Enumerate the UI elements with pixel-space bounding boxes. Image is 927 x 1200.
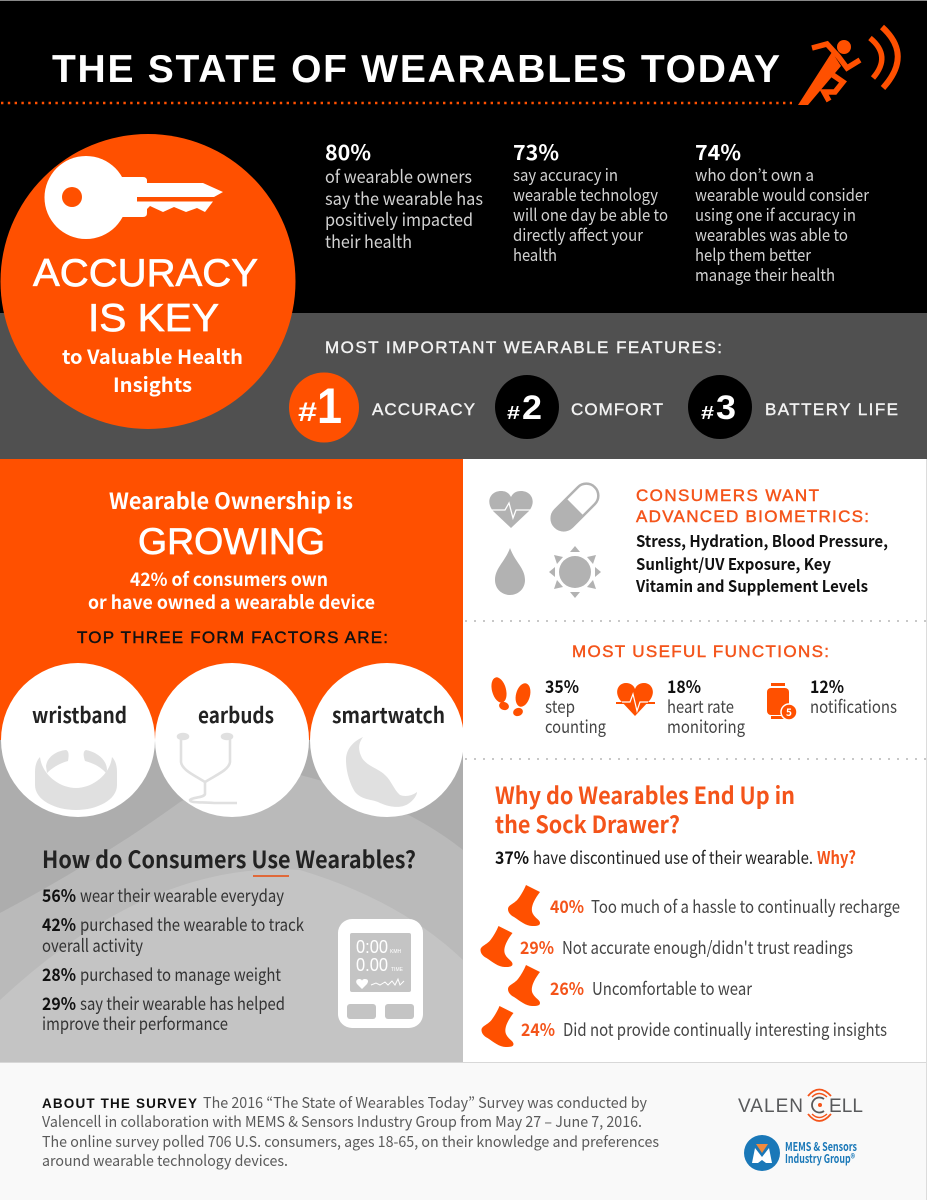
list: consumer usage stats: purchased to manage weight: [80, 962, 281, 987]
reason: uncomfortable: Uncomfortable to wear: [592, 976, 752, 1001]
logo: valencell: [738, 1090, 863, 1121]
heading: how do consumers use wearables: How do Consumers Use Wearables?: [42, 841, 416, 875]
reason: accuracy: Not accurate enough/didn't trust readings: [562, 935, 853, 960]
text: about the survey: [42, 1092, 659, 1171]
function: notifications: notifications: [810, 694, 897, 719]
text: about the survey: ABOUT THE SURVEY: [42, 1096, 197, 1111]
icon: orange heart: [616, 683, 655, 716]
function: step counting: [545, 674, 606, 739]
heading: sock drawer: the Sock Drawer?: [495, 806, 680, 840]
function: heart rate monitoring: [667, 674, 745, 739]
logo: valencell: VALEN: [738, 1096, 803, 1117]
form factor: earbuds: earbuds: [198, 700, 274, 730]
icon: fitness device: 0.00: [356, 955, 388, 975]
reason: recharge: 40%: [550, 894, 584, 919]
feature 3 battery life: BATTERY LIFE: [765, 400, 898, 419]
form factor: smartwatch: smartwatch: [332, 700, 445, 730]
icon: footprints: [489, 676, 533, 717]
list: consumer usage stats: purchased the wearable to track: [80, 912, 304, 937]
heading: accuracy is key: Insights: [113, 369, 192, 398]
heading: accuracy is key: [33, 252, 258, 398]
feature 1 accuracy: #: [298, 397, 317, 427]
form factor: wristband: [1, 663, 155, 817]
heading: most important features: MOST IMPORTANT WEARABLE FEATURES:: [325, 338, 722, 357]
icon: grey drop: [495, 548, 525, 595]
reason: uncomfortable: [508, 965, 752, 1006]
stat: 73%: health: [513, 242, 557, 266]
stat: 73%: say accuracy in: [513, 162, 618, 186]
heading: wearable ownership growing: or have owned a wearable device: [88, 589, 375, 615]
feature 2 comfort: [495, 375, 663, 439]
reason: insights: [482, 1006, 887, 1047]
list: consumer usage stats: 56%: [42, 883, 76, 908]
reason: insights: 24%: [521, 1017, 555, 1042]
heading: most useful functions: MOST USEFUL FUNCTIONS:: [572, 642, 829, 661]
reason: uncomfortable: 26%: [550, 976, 584, 1001]
heading: wearable ownership growing: Wearable Ownership is: [109, 484, 353, 516]
stat: 80%: say the wearable has: [325, 186, 483, 211]
list: consumer usage stats: overall activity: [42, 933, 143, 958]
logo: mems and sensors industry group: MEMS & Sensors: [785, 1138, 857, 1155]
text: biometrics list: Sunlight/UV Exposure, Key: [636, 551, 831, 575]
heading: accuracy is key: ACCURACY: [33, 252, 258, 295]
stat: 80%: positively impacted: [325, 207, 473, 232]
stat: 80%: their health: [325, 229, 412, 254]
stat: 74%: wearables was able to: [695, 222, 848, 246]
stat: 73%: [513, 137, 668, 266]
function: step counting: 35%: [545, 674, 579, 699]
icon: key: [44, 156, 223, 239]
stat: 73%: directly affect your: [513, 222, 644, 246]
heading: wearable ownership growing: GROWING: [138, 521, 325, 562]
function: heart rate monitoring: monitoring: [667, 714, 745, 739]
function: notifications: 12%: [810, 674, 844, 699]
logo: mems and sensors industry group: Industry Group®: [785, 1150, 855, 1167]
heading: wearable ownership growing: 42% of consumers own: [130, 566, 328, 592]
panel: features grey band: [0, 313, 927, 459]
feature 2 comfort: 2: [522, 389, 542, 427]
text: discontinued use: have discontinued use of their wearable.: [533, 845, 813, 870]
icon: fitness device: 0:00: [356, 937, 388, 957]
feature 2 comfort: COMFORT: [571, 400, 663, 419]
stat: 74%: [695, 137, 870, 286]
list: consumer usage stats: [42, 883, 304, 1036]
panel: accuracy is key circle: [0, 134, 296, 429]
icon: wristband: [35, 750, 117, 810]
heading: consumers want advanced biometrics: CONSUMERS WANT: [636, 486, 819, 505]
heading: accuracy is key: to Valuable Health: [62, 341, 243, 370]
logo: valencell: ELL: [829, 1096, 863, 1117]
function: heart rate monitoring: heart rate: [667, 694, 734, 719]
icon: earbuds: [178, 734, 237, 803]
text: about the survey: The 2016 “The State of Wearables Today” Survey was conducted by: [203, 1092, 647, 1113]
text: biometrics list: Stress, Hydration, Blood Pressure,: [636, 528, 888, 552]
form factor: earbuds: [155, 663, 309, 817]
stat: 73%: 73%: [513, 137, 559, 167]
list: consumer usage stats: wear their wearable everyday: [80, 883, 284, 908]
stat: 74%: manage their health: [695, 262, 835, 286]
form factor: wristband: wristband: [32, 700, 127, 730]
feature 3 battery life: 3: [716, 389, 736, 427]
heading: consumers want advanced biometrics: [636, 486, 869, 526]
heading: accuracy is key: IS KEY: [88, 297, 219, 340]
reason: recharge: [508, 885, 900, 926]
list: consumer usage stats: say their wearable has helped: [80, 991, 285, 1016]
text: biometrics list: Vitamin and Supplement Levels: [635, 573, 868, 597]
stat: 73%: will one day be able to: [513, 202, 668, 226]
list: consumer usage stats: improve their performance: [42, 1011, 228, 1036]
stat: 80%: 80%: [325, 137, 371, 167]
stat: 74%: 74%: [695, 137, 741, 167]
icon: orange watch: [767, 683, 797, 720]
stat: 80%: [325, 137, 483, 254]
stat: 74%: who don’t own a: [695, 162, 814, 186]
form factor: smartwatch: [310, 663, 464, 817]
stat: 74%: help them better: [695, 242, 812, 266]
feature 3 battery life: #: [701, 403, 714, 423]
function: notifications: [810, 674, 897, 719]
list: consumer usage stats: 28%: [42, 962, 76, 987]
panel: header black band: [0, 0, 927, 313]
panel: orange ownership background: [0, 459, 463, 749]
heading: wearable ownership growing: [88, 484, 375, 615]
text: about the survey: around wearable technology devices.: [42, 1150, 288, 1171]
feature 2 comfort: #: [507, 403, 520, 423]
reason: accuracy: [480, 926, 853, 967]
stat: 74%: using one if accuracy in: [695, 202, 856, 226]
panel: footer: [0, 1062, 927, 1200]
function: heart rate monitoring: 18%: [667, 674, 701, 699]
icon: smartwatch: [346, 737, 417, 807]
feature 1 accuracy: ACCURACY: [372, 400, 475, 419]
icon: grey pill: [545, 478, 604, 537]
heading: sock drawer: [495, 777, 795, 840]
stat: 74%: wearable would consider: [695, 182, 870, 206]
feature 1 accuracy: 1: [317, 378, 342, 434]
icon: grey sun: [549, 546, 601, 598]
icon: fitness device: KMH: [390, 949, 402, 955]
icon: orange watch: 5: [786, 704, 792, 719]
text: about the survey: Valencell in collaboration with MEMS & Sensors Industry Group from May 27 – June 7, 2016.: [42, 1111, 642, 1132]
stat: 80%: of wearable owners: [325, 164, 472, 189]
icon: fitness device: TIME: [391, 967, 404, 973]
list: consumer usage stats: 42%: [42, 912, 76, 937]
list: consumer usage stats: 29%: [42, 991, 76, 1016]
icon: fitness device: [338, 919, 423, 1028]
text: biometrics list: [635, 528, 888, 597]
reason: accuracy: 29%: [520, 935, 554, 960]
title: THE STATE OF WEARABLES TODAY: [52, 48, 780, 91]
feature 3 battery life: [688, 375, 898, 439]
logo: mems and sensors industry group: [744, 1135, 857, 1171]
text: about the survey: The online survey polled 706 U.S. consumers, ages 18-65, on their knowledge and preferences: [42, 1131, 659, 1152]
text: discontinued use: 37%: [495, 845, 529, 870]
heading: sock drawer: Why do Wearables End Up in: [495, 777, 795, 811]
heading: top three form factors: TOP THREE FORM FACTORS ARE:: [77, 628, 388, 647]
text: discontinued use: Why?: [817, 845, 856, 870]
icon: grey heart: [489, 491, 533, 528]
function: step counting: counting: [545, 714, 606, 739]
feature 1 accuracy: [289, 372, 475, 442]
stat: 73%: wearable technology: [513, 182, 658, 206]
icon: runner with signal: [798, 27, 898, 105]
panel: grey usage background: [0, 740, 463, 1062]
function: step counting: step: [545, 694, 575, 719]
heading: consumers want advanced biometrics: ADVANCED BIOMETRICS:: [636, 507, 869, 526]
